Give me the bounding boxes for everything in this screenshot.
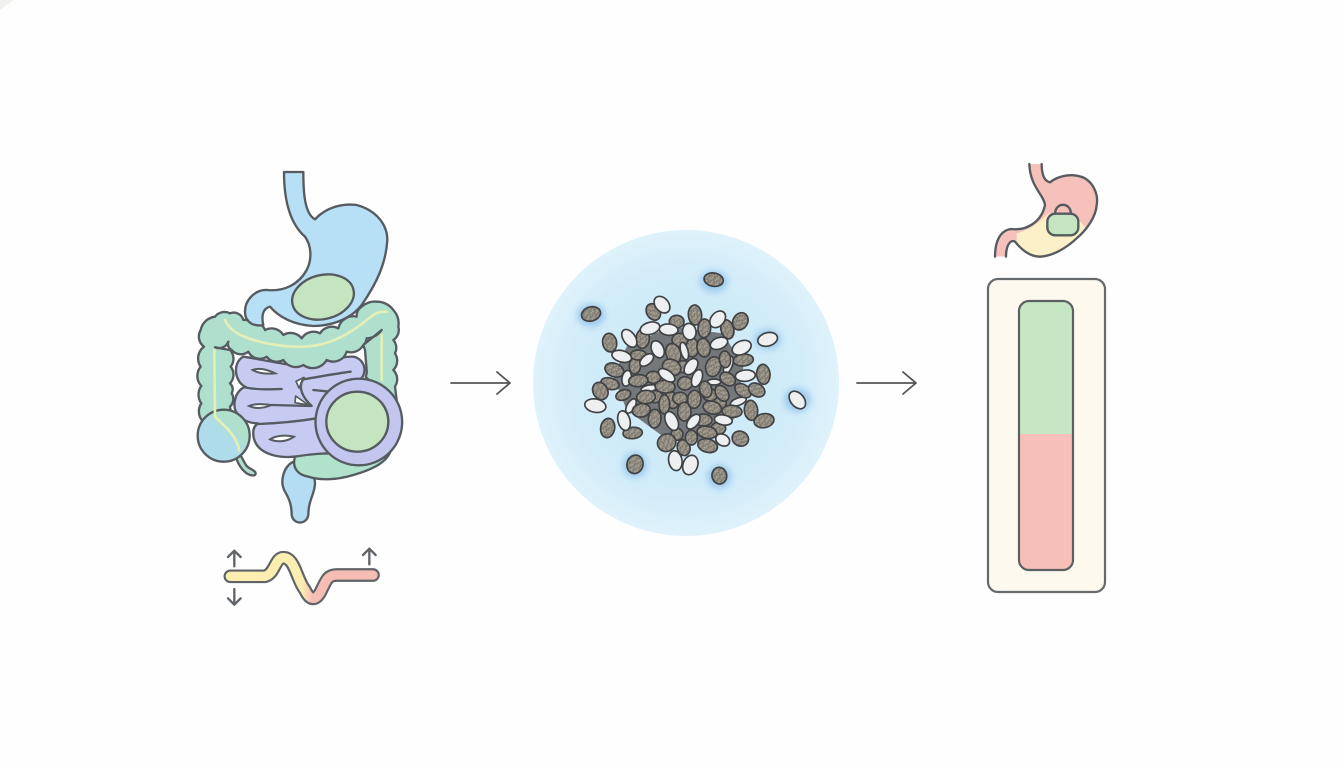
lock [1047, 205, 1078, 235]
arrows up and down [228, 549, 376, 605]
gauge green section [1019, 301, 1073, 434]
cecum [198, 410, 250, 462]
wave band [230, 558, 373, 598]
appendix [235, 452, 256, 475]
colon inner band [214, 312, 387, 451]
arrow: digestive to seeds [451, 372, 510, 394]
small intestine [234, 357, 380, 457]
infographic canvas [0, 0, 1106, 606]
corner mark [0, 0, 14, 10]
highlighted ring [315, 379, 402, 465]
icon: stomach with lock [994, 162, 1098, 258]
gauge red section [1019, 434, 1073, 570]
panel: seed disc [533, 230, 839, 536]
rectum [282, 447, 392, 522]
motility wave with arrows [228, 549, 376, 605]
colon [197, 302, 399, 475]
stomach contents [287, 268, 359, 326]
panel: balance gauge [988, 279, 1105, 592]
stomach [245, 172, 387, 326]
seeds [577, 271, 811, 489]
arrow: seeds to outcome [857, 372, 916, 394]
panel: digestive system [197, 172, 402, 522]
